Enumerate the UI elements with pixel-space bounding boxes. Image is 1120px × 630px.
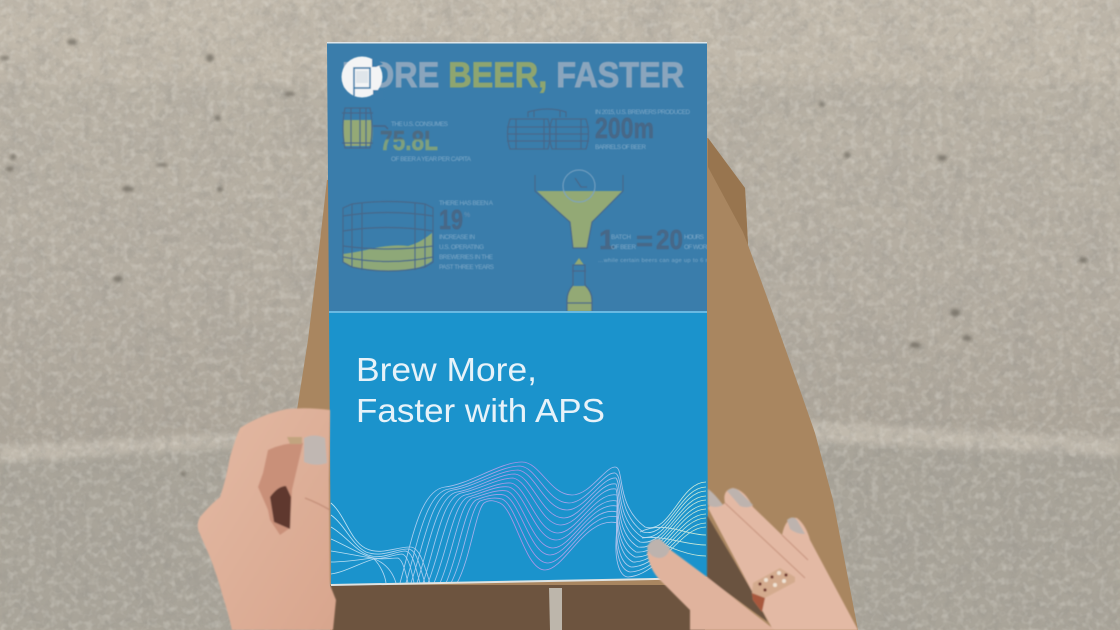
stat: 1 batch = 20 hours: = [636, 226, 653, 256]
stat: 200m [595, 109, 690, 151]
stat: 1 batch = 20 hours: 20 [656, 224, 683, 255]
wave line art [331, 462, 706, 583]
stat: 19%: INCREASE IN [439, 234, 475, 241]
stat: 200m: 200m [595, 113, 654, 145]
stat: 19%: 19 [439, 204, 463, 235]
cover: upper infographic panel [327, 42, 726, 312]
stat: 1 batch = 20 hours: OF WORK [684, 244, 712, 251]
stat: 19%: THERE HAS BEEN A [439, 200, 494, 207]
stat: 1 batch = 20 hours [598, 229, 707, 264]
stat: 1 batch = 20 hours: ...while certain beers can age up to 6 months [598, 258, 726, 264]
icon: stacked barrels [507, 109, 589, 149]
stat: 19%: BREWERIES IN THE [439, 254, 493, 261]
shadow between thumb and index [707, 515, 768, 622]
cover: lower blue panel [329, 312, 708, 585]
folded fingers [258, 443, 303, 535]
book bottom edge [331, 577, 708, 586]
stat: 1 batch = 20 hours: 1 [599, 224, 615, 255]
stat: 19% [439, 200, 494, 271]
stat: 1 batch = 20 hours: OF BEER [611, 244, 636, 251]
stat: 200m: IN 2015, U.S. BREWERS PRODUCED [595, 109, 690, 116]
stat: 75.8L: OF BEER A YEAR PER CAPITA [391, 156, 472, 163]
stat: 19%: % [464, 212, 471, 219]
stat: 19%: PAST THREE YEARS [439, 264, 494, 271]
left hand [198, 408, 336, 630]
stat: 75.8L [380, 121, 472, 163]
stat: 200m: BARRELS OF BEER [595, 144, 646, 151]
stat: 1 batch = 20 hours: HOURS [684, 234, 704, 241]
stat: 19%: U.S. OPERATING [439, 244, 484, 251]
icon: small barrel [342, 108, 388, 148]
shadow between fingers [270, 486, 291, 529]
logo badge [342, 56, 384, 99]
fingers [708, 488, 858, 630]
infographic title: MORE BEER, FASTER [342, 56, 684, 95]
blurred infographic [342, 56, 726, 312]
thumbnail [304, 436, 327, 465]
right hand [647, 488, 858, 630]
icon: funnel with clock [535, 170, 623, 248]
stat: 1 batch = 20 hours: BATCH [611, 234, 631, 241]
divider line [329, 311, 707, 313]
heading: Brew More, [356, 351, 537, 388]
book cover [327, 42, 726, 586]
icon: bottle with drop [567, 258, 592, 312]
stat: 75.8L: 75.8L [380, 125, 438, 156]
ring [752, 568, 795, 612]
nails [647, 488, 805, 558]
icon: large barrel [343, 202, 433, 271]
trousers: legs [297, 138, 858, 630]
thumb [647, 545, 775, 630]
heading: Faster with APS [356, 392, 605, 429]
heading [356, 351, 605, 429]
stat: 75.8L: THE U.S. CONSUMES [391, 121, 448, 128]
